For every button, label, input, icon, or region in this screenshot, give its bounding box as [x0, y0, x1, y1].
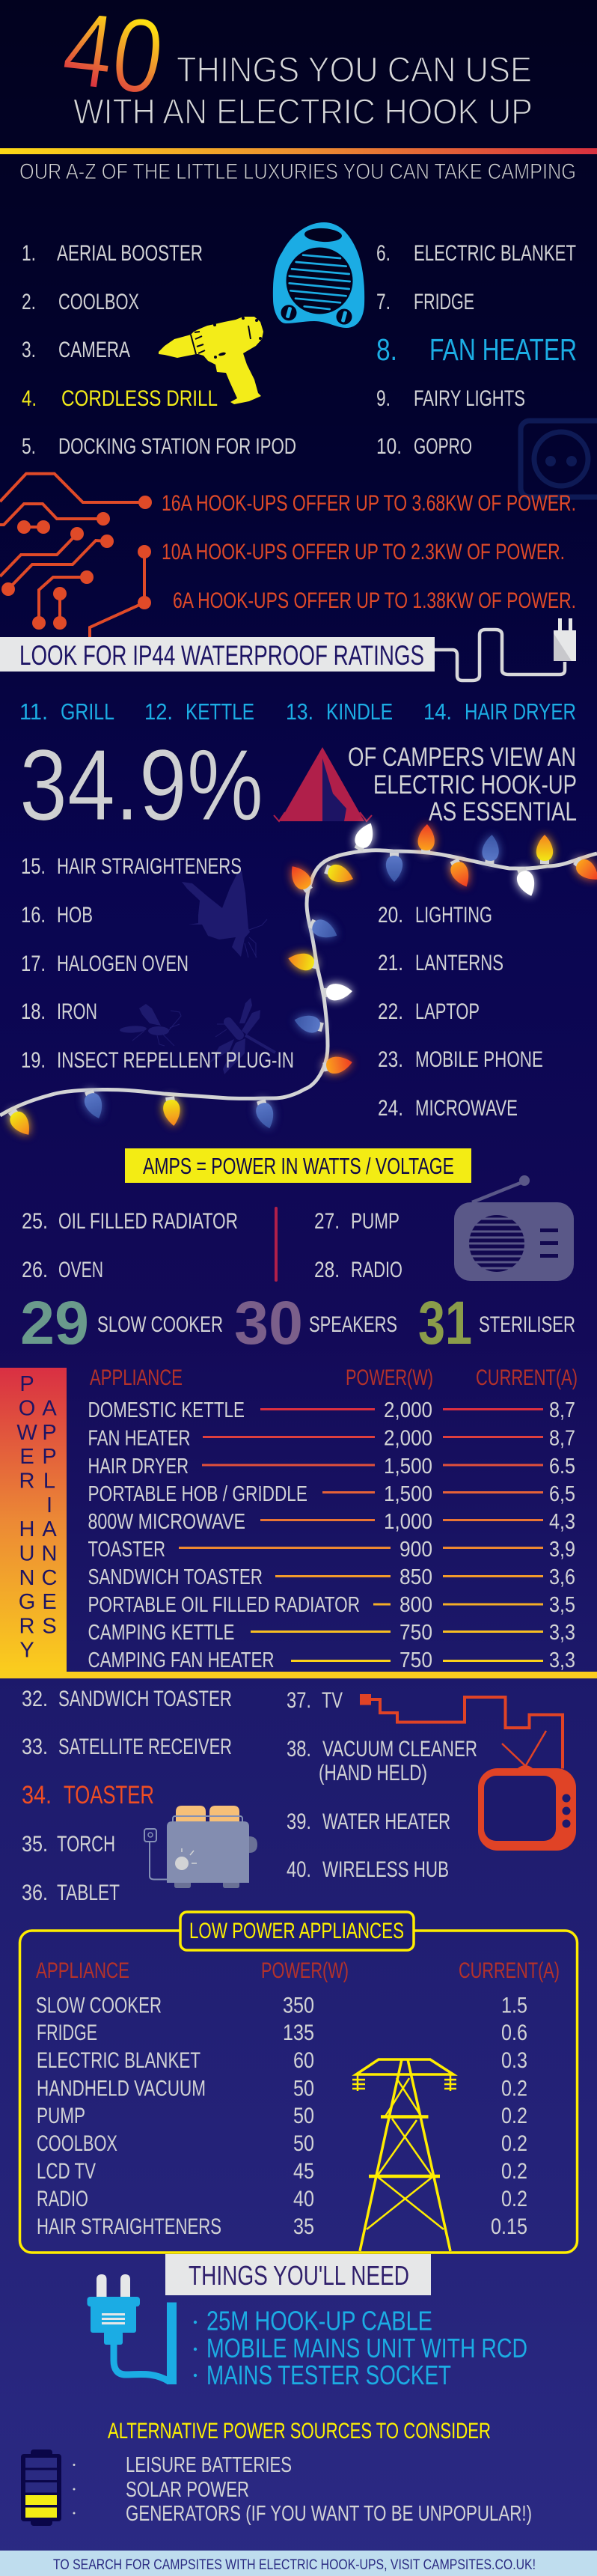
list: items 37-40: (HAND HELD) [319, 1761, 427, 1785]
list: items 11-14: KETTLE [186, 698, 254, 725]
list: items 29-31: 29 [20, 1289, 89, 1357]
table rows: 0.2 [501, 2131, 527, 2156]
icon: socket [521, 421, 597, 497]
list: items 6-10: 9. [376, 386, 391, 411]
list: items 15-19: HALOGEN OVEN [57, 951, 189, 976]
table header: APPLIANCE [90, 1365, 183, 1390]
table: power hungry appliances: CAMPING KETTLE [88, 1621, 235, 1645]
table rows: RADIO [37, 2187, 88, 2211]
panel: power hungry appliances side label: H [19, 1517, 34, 1541]
list: items 1-5: 2. [22, 290, 36, 314]
statistic: 34.9%: 34.9% [19, 728, 263, 841]
list: items 25-28: 27. [314, 1209, 340, 1234]
table: power hungry appliances: PORTABLE HOB / GRIDDLE [88, 1482, 307, 1506]
list: items 32-36: 32. [22, 1687, 48, 1711]
list: items 15-19: HAIR STRAIGHTENERS [57, 854, 242, 879]
table: power hungry appliances: 3,9 [549, 1538, 575, 1562]
list: items 15-19: 19. [21, 1048, 46, 1073]
table rows: PUMP [37, 2104, 85, 2128]
table: power hungry appliances: 2,000 [384, 1427, 432, 1451]
table rows: COOLBOX [37, 2131, 117, 2156]
table: power hungry appliances: 8,7 [549, 1427, 575, 1451]
table: power hungry appliances: 1,000 [384, 1510, 432, 1534]
list: items 1-5: CORDLESS DRILL [61, 386, 218, 411]
list: items 25-28: PUMP [351, 1209, 399, 1234]
icon: radio [454, 1175, 574, 1281]
list: items 15-19 [21, 854, 294, 1073]
gradient rule [0, 148, 597, 154]
panel: power hungry appliances side label: R [19, 1614, 34, 1638]
list: items 6-10: FRIDGE [414, 290, 474, 314]
list: items 32-36: 36. [22, 1881, 48, 1905]
table: power hungry appliances: 850 [399, 1565, 432, 1589]
list: items 11-14: 13. [286, 698, 313, 725]
list: items 32-36: 34. [22, 1781, 52, 1809]
table rows: 0.2 [501, 2104, 527, 2128]
list: items 32-36 [22, 1687, 232, 1905]
list: items 37-40: TV [322, 1688, 343, 1713]
list: items 1-5: 3. [22, 338, 36, 362]
footer [0, 2551, 597, 2576]
table: power hungry appliances: 3,3 [549, 1648, 575, 1672]
list: items 20-24: 24. [378, 1096, 403, 1121]
list: items 32-36: SANDWICH TOASTER [58, 1687, 232, 1711]
list: items 29-31: 30 [234, 1289, 303, 1357]
table rows: 0.6 [501, 2021, 527, 2045]
list: items 1-5: 5. [22, 434, 36, 459]
panel: power hungry appliances side label: R [19, 1469, 34, 1493]
list: items 29-31: 31 [418, 1289, 472, 1357]
panel: power hungry appliances side label: I [46, 1493, 52, 1517]
list: items 32-36: 33. [22, 1735, 48, 1759]
list: items 6-10: FAIRY LIGHTS [414, 386, 525, 411]
panel: power hungry appliances side label: N [19, 1566, 34, 1590]
list: items 37-40: 39. [287, 1809, 311, 1834]
table: power hungry appliances: DOMESTIC KETTLE [88, 1398, 245, 1422]
table header [36, 1958, 560, 1983]
table header: POWER(W) [346, 1365, 433, 1390]
list: alternative power sources [73, 2453, 532, 2526]
table: power hungry appliances: SANDWICH TOASTER [88, 1565, 263, 1589]
table rows: FRIDGE [37, 2021, 97, 2045]
table rows: 50 [293, 2077, 314, 2101]
list: items 29-31 [20, 1289, 575, 1357]
list: items 25-28 [22, 1207, 402, 1282]
panel: power hungry appliances side label: P [42, 1445, 57, 1469]
list: items 6-10 [376, 241, 577, 459]
list: items 1-5: AERIAL BOOSTER [57, 241, 203, 266]
table: power hungry appliances: 900 [399, 1538, 432, 1562]
list: items 6-10: 8. [376, 332, 397, 367]
table: power hungry appliances: 800 [399, 1593, 432, 1617]
table rows: 50 [293, 2131, 314, 2156]
list: items 15-19: 16. [21, 903, 46, 928]
table rows [36, 1993, 527, 2239]
title [56, 0, 533, 131]
list: items 25-28: 26. [22, 1258, 48, 1282]
list: items 20-24 [378, 903, 543, 1121]
table rows: 0.2 [501, 2187, 527, 2211]
list: items 1-5: DOCKING STATION FOR IPOD [58, 434, 296, 459]
list: items 32-36: TORCH [57, 1832, 115, 1857]
list: items 25-28: OVEN [58, 1258, 103, 1282]
table: power hungry appliances: HAIR DRYER [88, 1455, 189, 1479]
list: items 37-40: 38. [287, 1737, 311, 1762]
table rows: 35 [293, 2214, 314, 2239]
hook-up power facts [162, 491, 576, 613]
table: power hungry appliances: 6,5 [549, 1482, 575, 1506]
icon: mosquito silhouette [120, 1004, 181, 1046]
banner: things you'll need [165, 2254, 431, 2295]
icon: tent [274, 747, 372, 821]
circuit lines [0, 474, 152, 637]
list: items 25-28: RADIO [351, 1258, 402, 1282]
list: items 32-36: SATELLITE RECEIVER [58, 1735, 232, 1759]
table rows: 1.5 [501, 1993, 527, 2018]
list: things you'll need: MAINS TESTER SOCKET [206, 2360, 451, 2390]
table rows: 0.3 [501, 2048, 527, 2073]
list: items 20-24: LIGHTING [415, 903, 492, 928]
panel: power hungry appliances side label: E [42, 1590, 57, 1614]
table: power hungry appliances: 3,6 [549, 1565, 575, 1589]
list: items 37-40: 40. [287, 1857, 311, 1882]
list: items 20-24: LANTERNS [415, 951, 503, 975]
table: power hungry appliances: 750 [399, 1648, 432, 1672]
panel: power hungry appliances side label: A [42, 1517, 57, 1541]
icon: butterfly silhouette [182, 871, 267, 957]
table header: POWER(W) [261, 1958, 349, 1983]
callout: amps formula [125, 1148, 471, 1183]
list: items 20-24: 22. [378, 999, 403, 1024]
list: items 11-14: 11. [19, 698, 48, 725]
table rows: 0.2 [501, 2159, 527, 2184]
list: items 1-5: CAMERA [58, 338, 130, 362]
list: items 6-10: 7. [376, 290, 391, 314]
list: items 37-40 [287, 1688, 477, 1882]
panel: power hungry appliances side label [0, 1368, 597, 1678]
table rows: 40 [293, 2187, 314, 2211]
panel: power hungry appliances side label: U [19, 1542, 34, 1566]
panel: power hungry appliances side label: P [42, 1421, 57, 1445]
callout: amps formula: AMPS = POWER IN WATTS / VOLTAGE [143, 1153, 454, 1179]
panel: power hungry appliances side label: P [19, 1372, 34, 1396]
icon: cordless drill [159, 317, 263, 404]
panel: power hungry appliances side label: E [19, 1445, 34, 1469]
list: things you'll need: 25M HOOK-UP CABLE [206, 2306, 432, 2336]
table: power hungry appliances [88, 1365, 578, 1672]
list: items 25-28: 25. [22, 1209, 48, 1234]
list: items 15-19: INSECT REPELLENT PLUG-IN [57, 1048, 294, 1073]
fairy lights [0, 820, 597, 1139]
list: alternative power sources: LEISURE BATTERIES [126, 2453, 292, 2477]
banner: IP44 ratings: LOOK FOR IP44 WATERPROOF RATINGS [19, 640, 424, 671]
table: power hungry appliances: 1,500 [384, 1482, 432, 1506]
table rows: SLOW COOKER [36, 1993, 162, 2018]
list: items 20-24: MICROWAVE [415, 1096, 518, 1121]
list: items 11-14: GRILL [61, 698, 114, 725]
list: items 20-24: MOBILE PHONE [415, 1047, 543, 1072]
list: items 15-19: 17. [21, 951, 46, 976]
panel: power hungry appliances side label: N [42, 1542, 57, 1566]
panel: power hungry appliances side label: A [42, 1397, 57, 1421]
list: items 15-19: 18. [21, 999, 46, 1024]
table: power hungry appliances: 800W MICROWAVE [88, 1510, 245, 1534]
list: items 11-14: KINDLE [326, 698, 393, 725]
list: items 6-10: 6. [376, 241, 391, 266]
banner: IP44 ratings [0, 637, 435, 672]
statistic caption [348, 743, 577, 826]
table rows: 45 [293, 2159, 314, 2184]
list: items 25-28: OIL FILLED RADIATOR [58, 1209, 238, 1234]
list: items 37-40: 37. [287, 1688, 311, 1713]
title line 2: WITH AN ELECTRIC HOOK UP [73, 91, 533, 131]
panel: power hungry appliances side label: W [16, 1421, 37, 1445]
banner: things you'll need: THINGS YOU'LL NEED [189, 2260, 409, 2291]
list: items 20-24: 23. [378, 1047, 403, 1072]
table: power hungry appliances: CAMPING FAN HEATER [88, 1648, 274, 1672]
panel: low power appliances [19, 1912, 578, 2253]
table: power hungry appliances: PORTABLE OIL FILLED RADIATOR [88, 1593, 360, 1617]
panel: power hungry appliances side label: C [42, 1566, 57, 1590]
table: power hungry appliances: 750 [399, 1621, 432, 1645]
table rows: 350 [283, 1993, 314, 2018]
list: items 25-28: 28. [314, 1258, 340, 1282]
list: items 11-14: 14. [423, 698, 452, 725]
table rows: 135 [283, 2021, 314, 2045]
table rows: 0.2 [501, 2077, 527, 2101]
icon: cable and plug [435, 618, 576, 680]
icon: blue plug [87, 2274, 177, 2384]
list: items 20-24: 21. [378, 951, 403, 975]
list: items 1-5: 4. [22, 386, 37, 411]
icon: toaster [144, 1806, 257, 1888]
heading: low power appliances: LOW POWER APPLIANCES [189, 1919, 404, 1943]
table: power hungry appliances: 4,3 [549, 1510, 575, 1534]
list: items 29-31: SLOW COOKER [97, 1312, 223, 1337]
list: items 32-36: TABLET [57, 1881, 120, 1905]
table rows: ELECTRIC BLANKET [37, 2048, 200, 2073]
list: items 20-24: 20. [378, 903, 403, 928]
icon: electricity pylon [352, 2059, 456, 2251]
list: items 37-40: VACUUM CLEANER [322, 1737, 477, 1762]
icon: fan heater [273, 222, 364, 328]
table: power hungry appliances: 3,3 [549, 1621, 575, 1645]
panel: power hungry appliances side label: O [19, 1397, 35, 1421]
list: items 32-36: 35. [22, 1832, 48, 1857]
list: alternative power sources: SOLAR POWER [126, 2478, 249, 2502]
list: items 1-5: COOLBOX [58, 290, 139, 314]
list: items 15-19: HOB [57, 903, 93, 928]
table rows: LCD TV [37, 2159, 96, 2184]
panel: power hungry appliances side label: L [43, 1469, 55, 1493]
table rows: HANDHELD VACUUM [37, 2077, 206, 2101]
list: items 15-19: 15. [21, 854, 46, 879]
icon: dragonfly silhouette [209, 998, 275, 1074]
table: power hungry appliances: FAN HEATER [88, 1427, 190, 1451]
icon: television with cable [360, 1694, 576, 1851]
list: items 20-24: LAPTOP [415, 999, 480, 1024]
table: power hungry appliances: 1,500 [384, 1455, 432, 1479]
list: items 37-40: WATER HEATER [322, 1809, 450, 1834]
table: power hungry appliances: 6.5 [549, 1455, 575, 1479]
panel: power hungry appliances side label: Y [19, 1638, 34, 1662]
list: items 37-40: WIRELESS HUB [322, 1857, 449, 1882]
table: power hungry appliances: 8,7 [549, 1398, 575, 1422]
icon: battery [21, 2449, 61, 2526]
list: items 15-19: IRON [57, 999, 97, 1024]
list: things you'll need [194, 2306, 527, 2390]
list: items 11-14 [19, 698, 576, 725]
table rows: HAIR STRAIGHTENERS [37, 2214, 221, 2239]
heading: low power appliances [180, 1912, 414, 1950]
list: items 1-5 [22, 241, 296, 459]
table: power hungry appliances: 3,5 [549, 1593, 575, 1617]
list: items 6-10: 10. [376, 434, 402, 459]
table: power hungry appliances: TOASTER [88, 1538, 165, 1562]
title line 1: THINGS YOU CAN USE [177, 49, 532, 89]
list: items 1-5: 1. [22, 241, 36, 266]
table rows: 50 [293, 2104, 314, 2128]
table rows: 0.15 [491, 2214, 527, 2239]
list: items 6-10: GOPRO [414, 434, 472, 459]
panel: power hungry appliances side label: G [19, 1590, 35, 1614]
list: items 11-14: 12. [144, 698, 173, 725]
table rows: 60 [293, 2048, 314, 2073]
table header [90, 1365, 578, 1390]
table header: CURRENT(A) [459, 1958, 560, 1983]
list: items 29-31: SPEAKERS [309, 1312, 397, 1337]
panel: power hungry appliances side label: S [42, 1614, 57, 1638]
table header: APPLIANCE [36, 1958, 129, 1983]
table: power hungry appliances: 2,000 [384, 1398, 432, 1422]
list: items 32-36: TOASTER [64, 1781, 154, 1809]
